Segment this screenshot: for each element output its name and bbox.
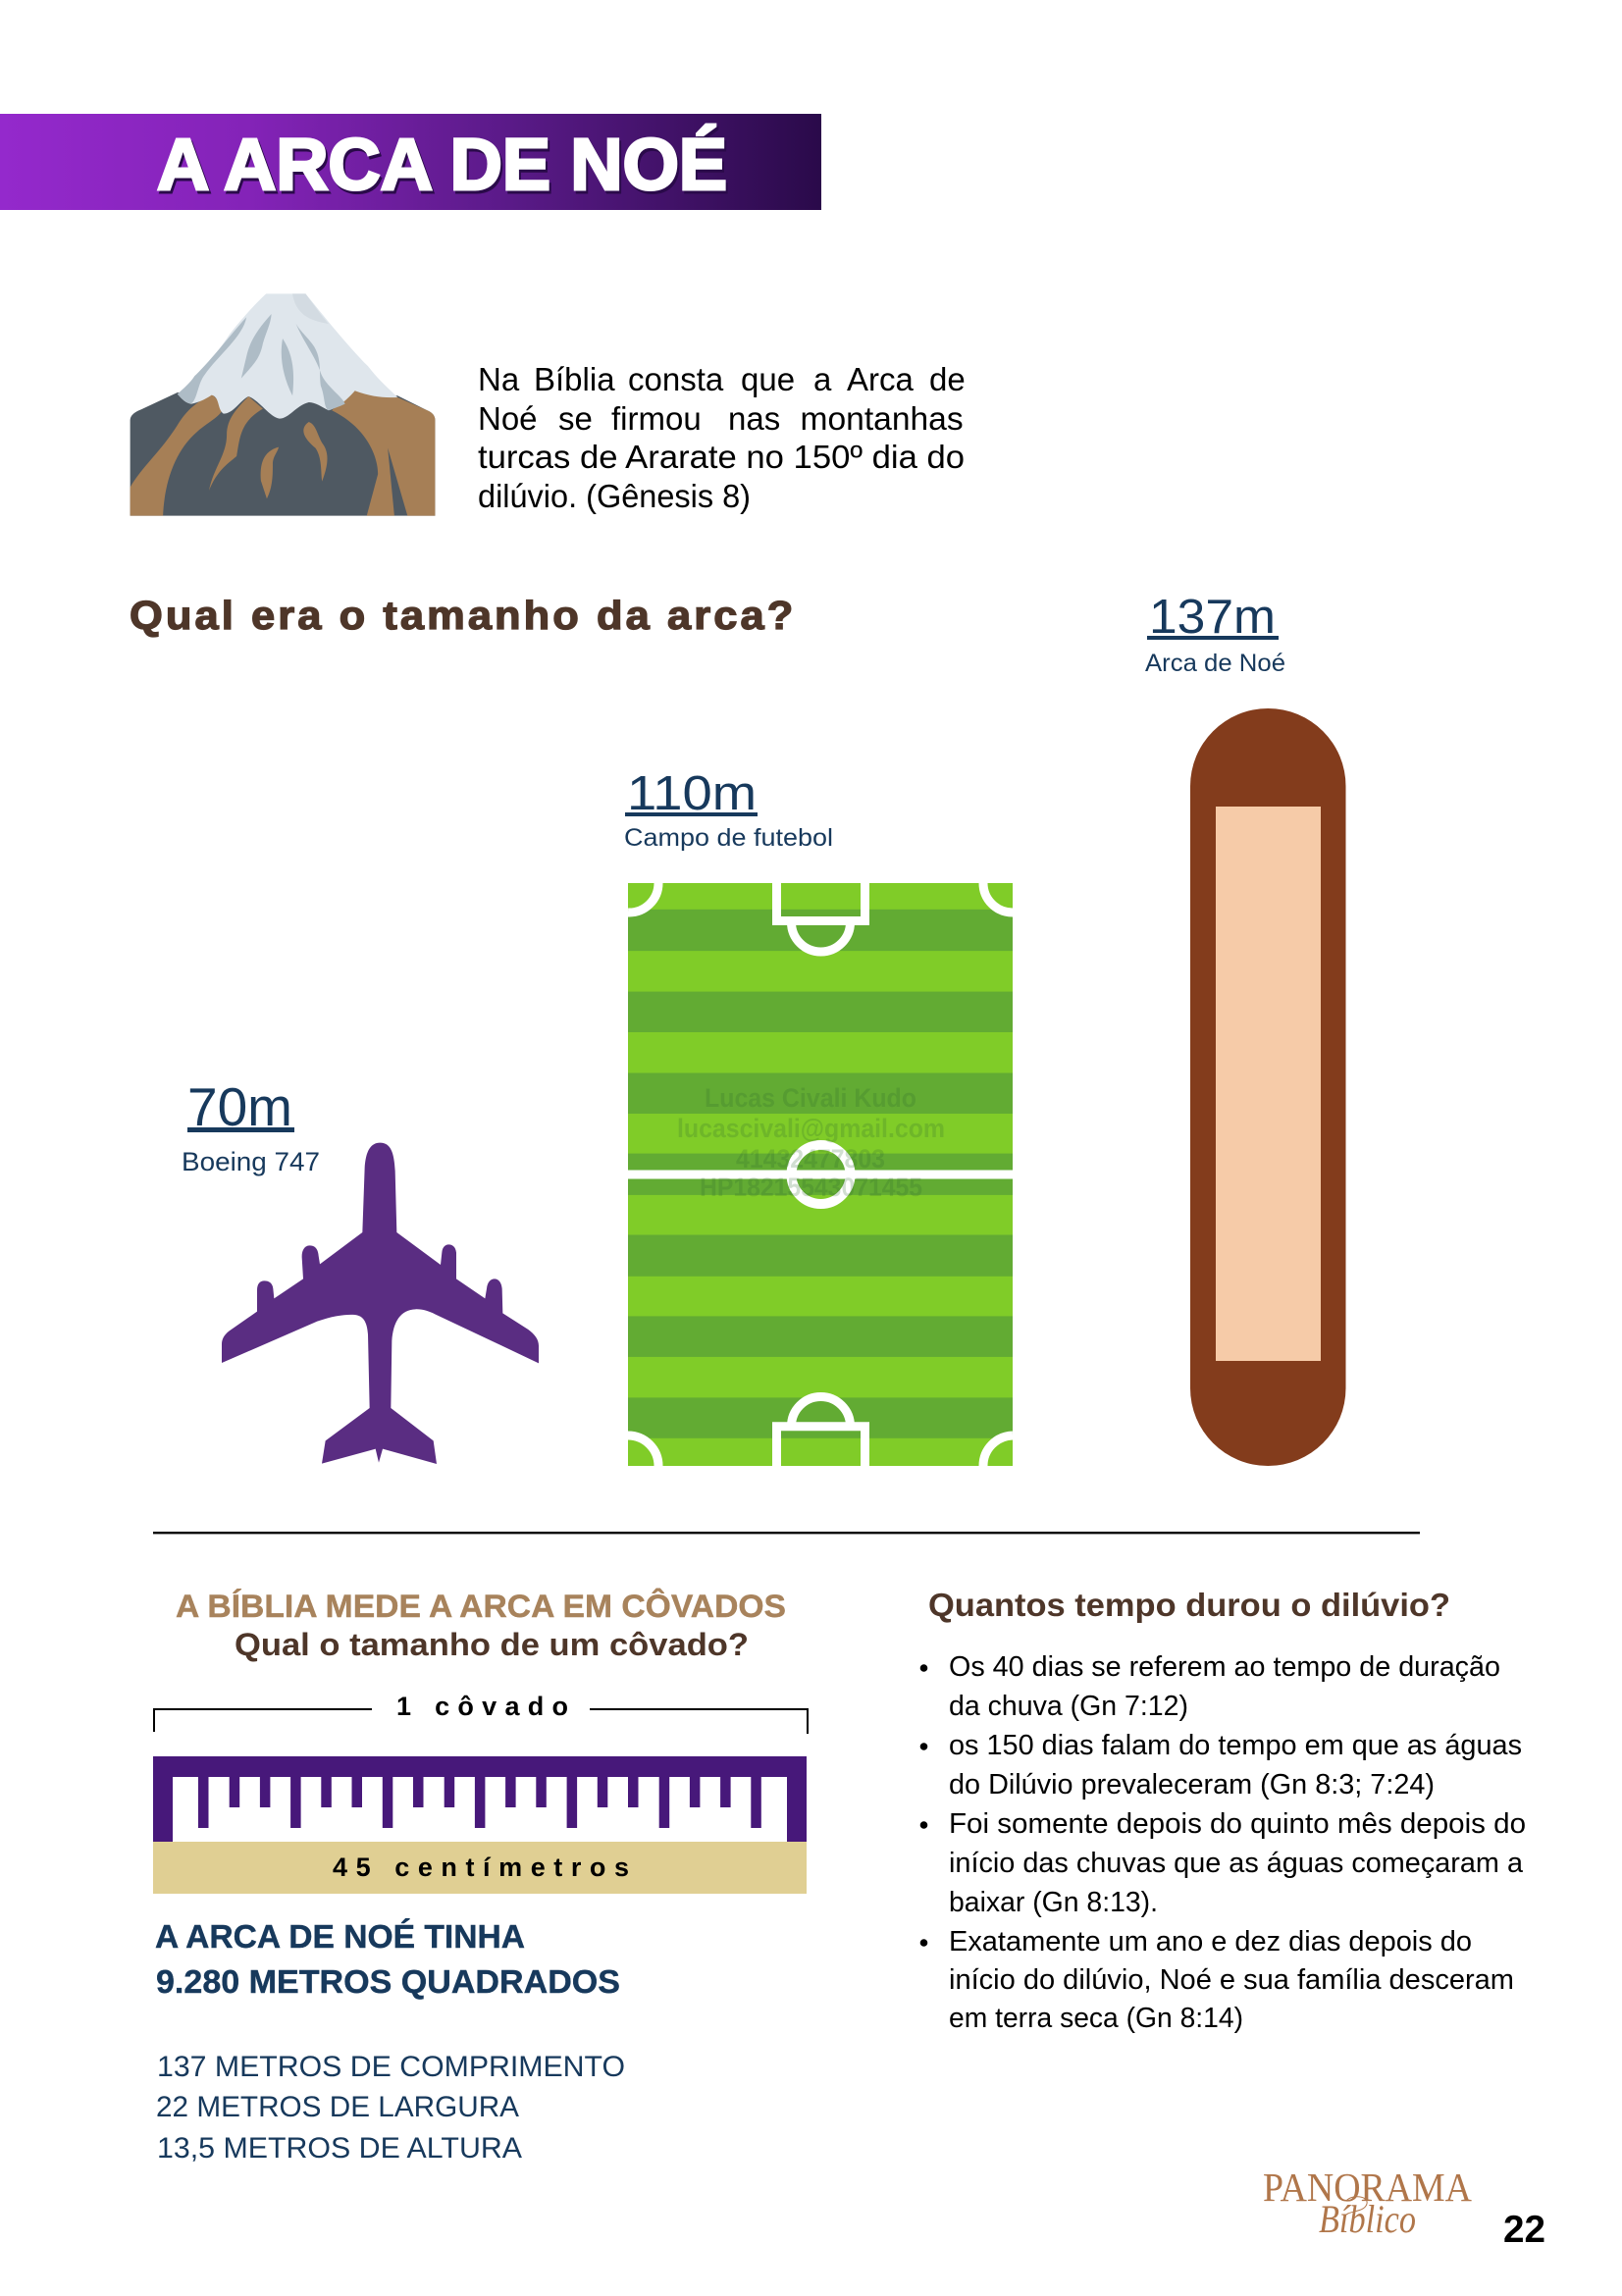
icon: airplane silhouette bbox=[222, 1143, 539, 1464]
text block: ark location: Arca bbox=[847, 361, 915, 397]
bullet list: flood duration bbox=[920, 1651, 1526, 2034]
bullet list: flood duration: baixar (Gn 8:13). bbox=[949, 1887, 1158, 1918]
heading: cubit measure: Qual o tamanho de um côvado? bbox=[235, 1627, 749, 1662]
text block: ark dimensions bbox=[156, 2051, 625, 2165]
text block: ark location: firmou bbox=[611, 400, 702, 437]
text block: ark location: turcas de Ararate no 150º dia do bbox=[478, 439, 965, 475]
text block: ark location: Bíblia bbox=[534, 361, 615, 397]
bullet list: flood duration: Os 40 dias se referem ao tempo de duração bbox=[949, 1651, 1500, 1683]
text block: ark location: de bbox=[929, 361, 966, 397]
text block: ark dimensions: 22 METROS DE LARGURA bbox=[156, 2091, 519, 2123]
text block: ark dimensions: 13,5 METROS DE ALTURA bbox=[157, 2132, 522, 2165]
heading: flood duration: Quantos tempo durou o dilúvio? bbox=[928, 1587, 1450, 1623]
heading: cubit measure bbox=[176, 1589, 786, 1662]
bullet list: flood duration: Foi somente depois do quinto mês depois do bbox=[949, 1808, 1526, 1840]
bullet list: flood duration: em terra seca (Gn 8:14) bbox=[949, 2003, 1243, 2034]
label: 137m Noah's ark bbox=[1145, 591, 1285, 677]
bullet list: flood duration: início das chuvas que as águas começaram a bbox=[949, 1848, 1524, 1879]
label: 137m Noah's ark: 137m bbox=[1149, 591, 1276, 644]
text block: ark location: montanhas bbox=[801, 401, 964, 438]
label: 70m Boeing 747: Boeing 747 bbox=[182, 1147, 320, 1176]
text block: ark location: consta bbox=[628, 361, 724, 397]
label: 110m football field: Campo de futebol bbox=[624, 824, 833, 852]
watermark text bbox=[677, 1083, 945, 1202]
bullet list: flood duration: da chuva (Gn 7:12) bbox=[949, 1691, 1188, 1722]
label: 70m Boeing 747: 70m bbox=[187, 1076, 292, 1137]
label: 70m Boeing 747 bbox=[182, 1076, 320, 1176]
ruler: 45 centímetros bbox=[153, 1756, 807, 1894]
bullet list: flood duration: início do dilúvio, Noé e sua família desceram bbox=[949, 1964, 1514, 1996]
logo: Panorama Bíblico: PANORAMA bbox=[1263, 2165, 1472, 2210]
text block: ark area: A ARCA DE NOÉ TINHA bbox=[155, 1918, 525, 1955]
page number: 22 bbox=[1503, 2209, 1545, 2251]
heading: ark size: Qual era o tamanho da arca? bbox=[130, 593, 793, 638]
text block: ark location bbox=[478, 361, 966, 514]
watermark text: 41432477803 bbox=[736, 1144, 885, 1174]
heading: cubit measure: A BÍBLIA MEDE A ARCA EM CÔVADOS bbox=[176, 1589, 786, 1624]
watermark text: lucascivali@gmail.com bbox=[677, 1114, 945, 1143]
label: 110m football field bbox=[624, 767, 833, 852]
text block: ark location: se bbox=[558, 400, 593, 437]
ruler bracket: 1 côvado bbox=[154, 1692, 808, 1734]
text block: ark location: que bbox=[741, 361, 795, 397]
logo: Panorama Bíblico bbox=[1263, 2165, 1472, 2241]
text block: ark location: Na bbox=[478, 361, 520, 397]
football field bbox=[628, 883, 1013, 1466]
text block: ark location: a bbox=[813, 361, 832, 397]
label: 137m Noah's ark: Arca de Noé bbox=[1145, 650, 1285, 677]
watermark text: HP18215543071455 bbox=[700, 1173, 922, 1202]
ruler: 45 centímetros: 45 centímetros bbox=[333, 1852, 629, 1882]
text block: ark location: nas bbox=[728, 400, 780, 437]
title banner bbox=[0, 114, 821, 210]
logo: Panorama Bíblico: Bíblico bbox=[1319, 2197, 1416, 2241]
title: A ARCA DE NOÉ bbox=[157, 124, 727, 205]
text block: ark location: Noé bbox=[478, 400, 538, 437]
text block: ark dimensions: 137 METROS DE COMPRIMENTO bbox=[157, 2051, 625, 2083]
bullet list: flood duration: Exatamente um ano e dez dias depois do bbox=[949, 1926, 1472, 1957]
bullet list: flood duration: do Dilúvio prevaleceram (Gn 8:3; 7:24) bbox=[949, 1769, 1435, 1800]
icon: snow-capped mountain bbox=[131, 293, 435, 516]
text block: ark area: 9.280 METROS QUADRADOS bbox=[156, 1963, 620, 2000]
watermark text: Lucas Civali Kudo bbox=[705, 1083, 916, 1113]
text block: ark area bbox=[155, 1918, 620, 2000]
ruler bracket: 1 côvado: 1 côvado bbox=[396, 1692, 568, 1721]
ark top-view shape bbox=[1190, 708, 1346, 1466]
label: 110m football field: 110m bbox=[627, 767, 757, 820]
text block: ark location: dilúvio. (Gênesis 8) bbox=[478, 478, 751, 514]
bullet list: flood duration: os 150 dias falam do tempo em que as águas bbox=[949, 1730, 1522, 1761]
